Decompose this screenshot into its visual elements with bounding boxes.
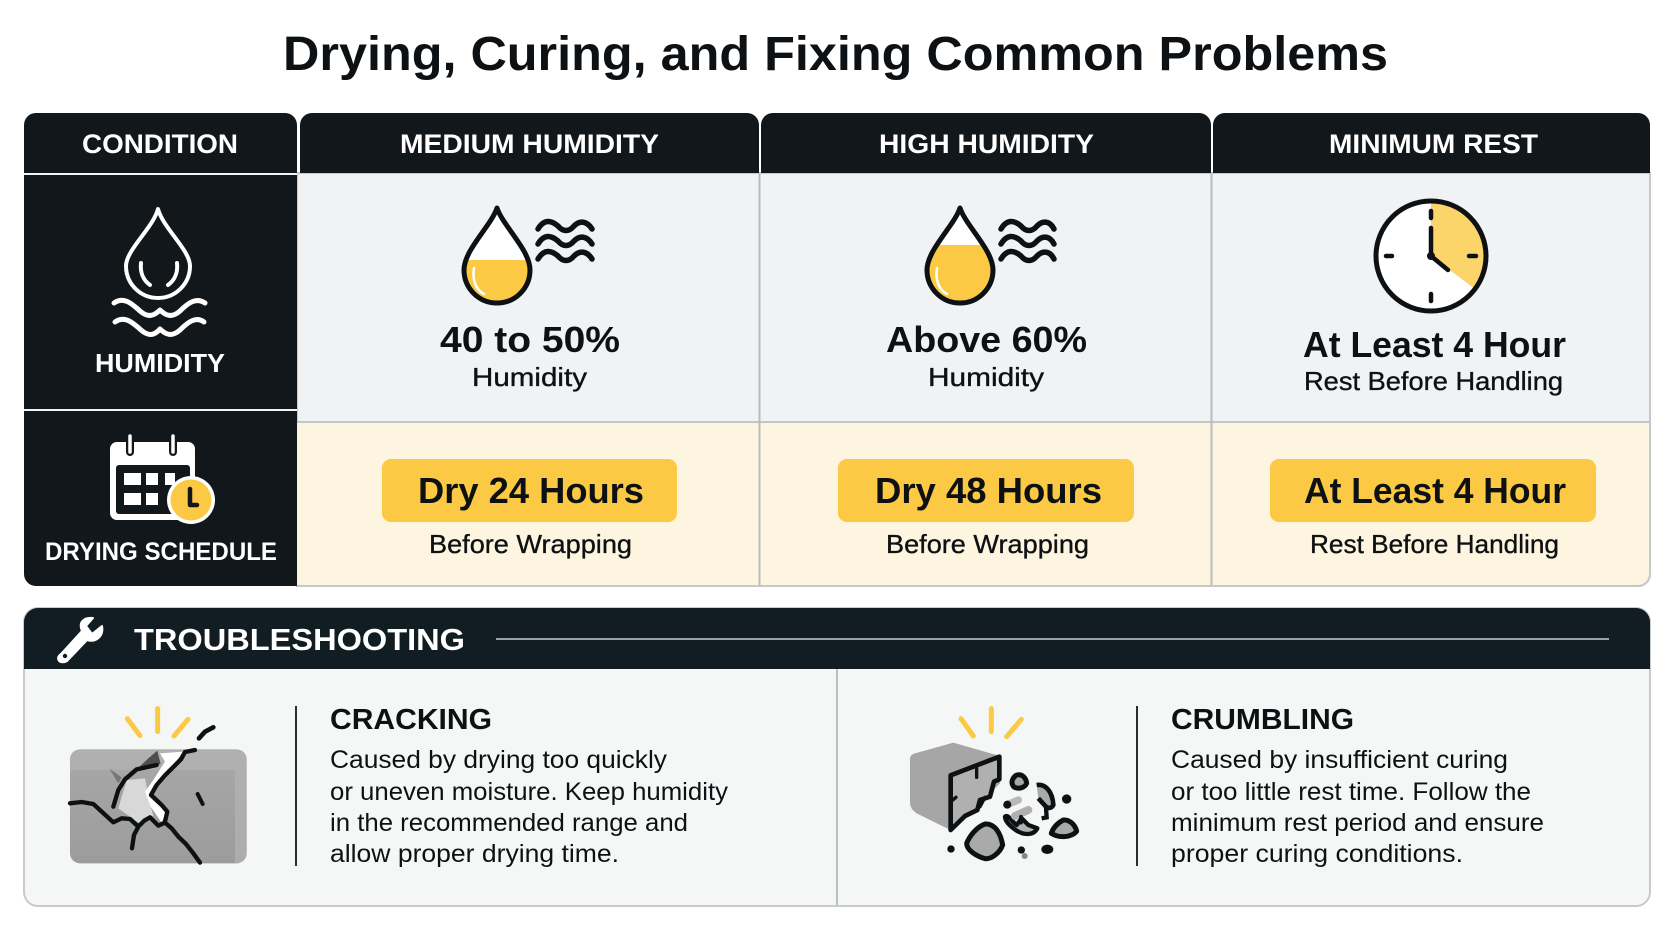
pill: dry 24 hours (382, 459, 677, 522)
label: humidity: HUMIDITY (95, 348, 225, 378)
column header: minimum rest: MINIMUM REST (1329, 129, 1539, 159)
stat: 40 to 50% humidity: 40 to 50% (440, 319, 620, 360)
header bar (24, 608, 1650, 669)
heading: crumbling: CRUMBLING (1171, 704, 1354, 736)
divider (295, 706, 297, 866)
divider between problems (836, 669, 838, 905)
icon: mostly filled drop with waves (922, 208, 1054, 309)
text: cracking description (330, 746, 729, 868)
column header: medium humidity (300, 113, 759, 173)
pill: dry 24 hours: Dry 24 Hours (418, 470, 644, 511)
text: crumbling description (1171, 746, 1544, 868)
title: Drying, Curing, and Fixing Common Problems (283, 28, 1388, 81)
stat: above 60% humidity: Above 60% (886, 319, 1087, 360)
icon: humidity drop with waves (114, 209, 205, 334)
label: drying schedule: DRYING SCHEDULE (45, 538, 277, 566)
heading: cracking: CRACKING (330, 704, 492, 736)
text: crumbling description: Caused by insufficient curing (1171, 746, 1508, 774)
column header: high humidity: HIGH HUMIDITY (879, 129, 1094, 159)
pill: at least 4 hour (1270, 459, 1596, 522)
pill: at least 4 hour: At Least 4 Hour (1304, 470, 1566, 511)
caption: before wrapping: Before Wrapping (429, 529, 632, 559)
panel: left label column (24, 113, 297, 586)
panel: troubleshooting (24, 608, 1650, 906)
stat: at least 4 hour rest: Rest Before Handling (1304, 366, 1563, 396)
icon: crumbling block (910, 709, 1077, 859)
icon: calendar with clock (110, 436, 215, 524)
stat: 40 to 50% humidity (440, 319, 620, 392)
icon: clock with shaded sector (1376, 201, 1486, 311)
column header: high humidity (761, 113, 1211, 173)
panel: schedule table (24, 113, 1650, 586)
divider (1136, 706, 1138, 866)
table body background (297, 173, 1650, 586)
pill: dry 48 hours (838, 459, 1134, 522)
icon: half-filled drop with waves (460, 208, 592, 310)
stat: at least 4 hour rest: At Least 4 Hour (1303, 324, 1566, 365)
caption: before wrapping: Before Wrapping (886, 529, 1089, 559)
stat: 40 to 50% humidity: Humidity (472, 362, 587, 392)
stat: above 60% humidity (886, 319, 1087, 392)
text: cracking description: or uneven moisture. Keep humidity (330, 778, 729, 806)
caption: rest before handling: Rest Before Handling (1310, 529, 1559, 559)
column header: medium humidity: MEDIUM HUMIDITY (400, 129, 659, 159)
text: crumbling description: minimum rest period and ensure (1171, 809, 1544, 837)
heading: condition: CONDITION (82, 129, 238, 159)
text: cracking description: allow proper drying time. (330, 840, 619, 868)
panel background (24, 608, 1650, 906)
icon: wrench (58, 618, 102, 662)
text: crumbling description: proper curing conditions. (1171, 840, 1463, 868)
text: cracking description: Caused by drying too quickly (330, 746, 668, 774)
column header: minimum rest (1213, 113, 1650, 173)
stat: at least 4 hour rest (1303, 324, 1566, 396)
text: cracking description: in the recommended range and (330, 809, 688, 837)
stat: above 60% humidity: Humidity (928, 362, 1044, 392)
text: crumbling description: or too little rest time. Follow the (1171, 778, 1531, 806)
pill: dry 48 hours: Dry 48 Hours (875, 470, 1102, 511)
icon: cracked block (70, 709, 247, 863)
heading: troubleshooting: TROUBLESHOOTING (134, 622, 465, 657)
